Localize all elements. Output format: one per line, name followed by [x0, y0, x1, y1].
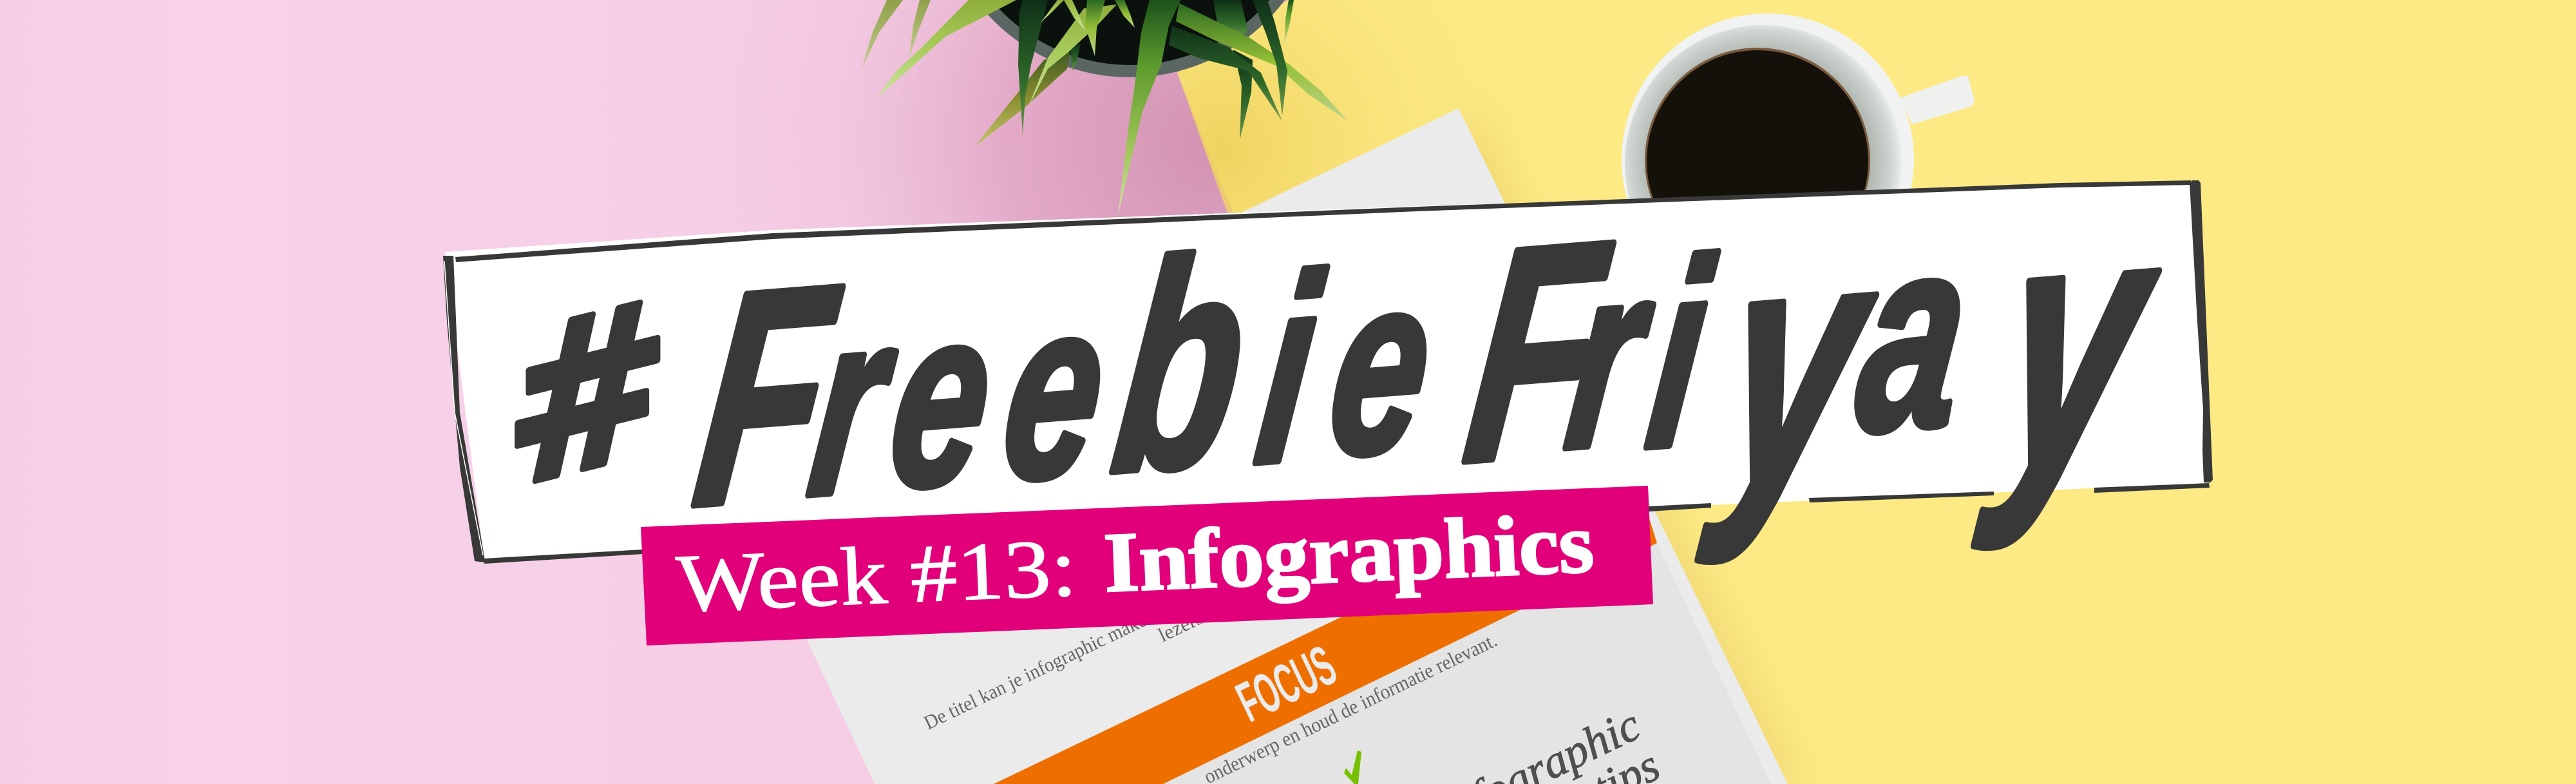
- subtitle regular part: Week #13:: [674, 522, 1079, 629]
- cup body: [1622, 14, 1914, 306]
- hash sign: #: [504, 251, 671, 539]
- lettering: a: [1834, 180, 1993, 490]
- lettering: b: [1089, 195, 1273, 535]
- leaves: [862, 0, 1348, 216]
- cup of coffee: [1622, 14, 1975, 306]
- magenta subtitle banner: [641, 486, 1653, 645]
- intro text line two: lezers: [1155, 606, 1206, 646]
- icon: green check: [1344, 751, 1361, 784]
- lettering: y: [1957, 136, 2193, 553]
- lettering: r: [1546, 210, 1676, 502]
- band label: FOCUS: [1227, 633, 1345, 734]
- banner shape: [641, 486, 1653, 645]
- lettering: i: [1235, 220, 1344, 519]
- infographic paper sheet: [723, 108, 1803, 784]
- intro text: De titel kan je infographic maken: [920, 604, 1159, 734]
- white title frame: [443, 180, 2213, 564]
- cup handle: [1900, 76, 1975, 124]
- orange band: [994, 475, 1657, 784]
- shadow on pink paper: [683, 0, 1352, 657]
- shadow on yellow paper: [1177, 0, 1558, 490]
- lettering: e: [868, 253, 1016, 541]
- lower content panel: [1163, 543, 1771, 784]
- frame left line: [443, 256, 485, 562]
- lettering: i: [1626, 205, 1735, 504]
- focus text: onderwerp en houd de informatie relevant.: [1200, 628, 1501, 784]
- title: #FreebieFriyay: [504, 136, 2193, 569]
- coffee: [1645, 48, 1870, 273]
- lettering: e: [1308, 221, 1455, 509]
- plant in pot: [862, 0, 1348, 216]
- frame left highlight: [444, 261, 483, 555]
- background: yellow paper: [1177, 0, 2576, 784]
- frame fill: [445, 183, 2208, 559]
- cup inner wall: [1625, 25, 1902, 302]
- paper page: [723, 108, 1788, 784]
- subtitle bold part: Infographics: [1102, 495, 1596, 610]
- frame right line: [2190, 180, 2213, 483]
- lettering: e: [981, 245, 1129, 533]
- lettering: F: [1441, 178, 1635, 526]
- lettering: y: [1681, 164, 1909, 566]
- paper shadow: [1417, 108, 1803, 784]
- lettering: r: [788, 257, 919, 550]
- frame bottom line segments: [484, 483, 2210, 564]
- lettering: F: [670, 222, 865, 569]
- pot: [937, 0, 1323, 77]
- frame top line: [455, 180, 2191, 262]
